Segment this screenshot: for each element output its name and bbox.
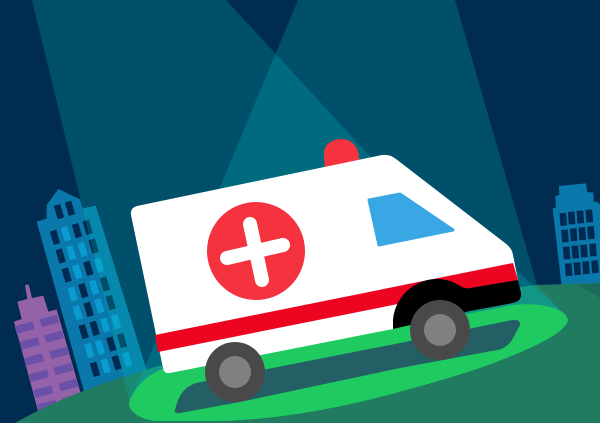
black bumper and wheel arch <box>393 279 521 329</box>
building: right blue tower <box>553 183 600 287</box>
ambulance shadow <box>175 320 520 413</box>
rear wheel <box>205 342 265 402</box>
ground: green hill <box>15 283 600 423</box>
green oval spotlight on the ground <box>129 304 568 421</box>
ambulance body <box>131 155 519 373</box>
siren light <box>324 139 360 172</box>
building: purple tower <box>14 284 82 418</box>
ground shade: dark band at right <box>578 283 600 298</box>
red stripe <box>155 263 518 352</box>
spotlight beam: right <box>130 0 568 403</box>
medical cross emblem <box>207 202 305 300</box>
ambulance <box>131 139 521 402</box>
building: large blue tower <box>37 189 147 403</box>
front wheel <box>410 300 470 360</box>
window <box>369 194 453 245</box>
